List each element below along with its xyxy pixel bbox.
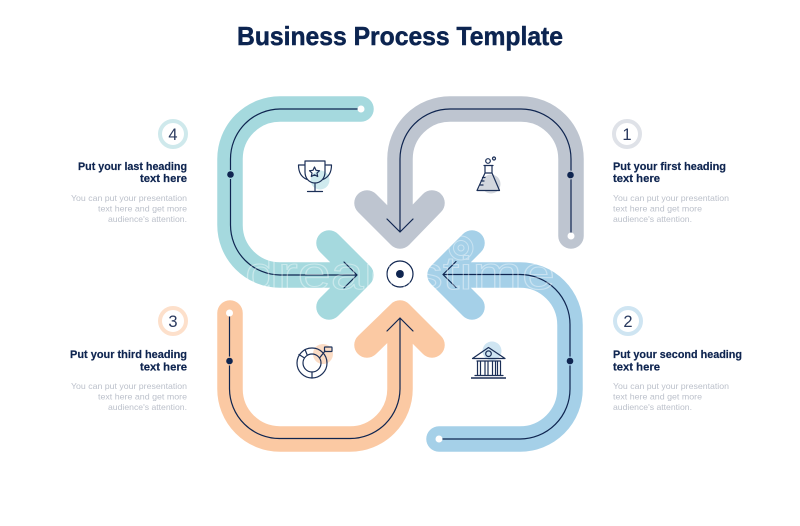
step 2 text block: Put your second heading: [613, 349, 742, 361]
step 1 text block: text here: [613, 173, 660, 185]
step 2 text block: audience's attention.: [613, 402, 692, 412]
icon: trophy: [298, 161, 332, 192]
step 4 text block: Put your last heading: [78, 161, 187, 173]
icon: flask: [477, 157, 500, 194]
step 4 text block: You can put your presentation: [71, 193, 187, 203]
step 1 text block: You can put your presentation: [613, 193, 729, 203]
step 1 text block: text here and get more: [613, 204, 702, 214]
step 1 text block: audience's attention.: [613, 214, 692, 224]
step 4 badge: 4: [168, 126, 178, 144]
arrow: step 1 grey: [367, 109, 575, 240]
step 1 text block: Put your first heading: [613, 161, 726, 173]
step 4 text block: audience's attention.: [108, 214, 187, 224]
arrow: step 2 blue: [436, 243, 574, 442]
watermark: [245, 236, 555, 299]
step 2 text block: text here and get more: [613, 392, 702, 402]
step 1 text block: [613, 121, 729, 224]
icon: ring chart: [297, 344, 333, 378]
arrow: step 4 teal: [226, 106, 364, 307]
step 2 badge: 2: [623, 313, 633, 331]
step 1 badge: 1: [622, 126, 632, 144]
watermark: dreamstime: [245, 247, 555, 299]
step 3 text block: [70, 308, 187, 412]
step 3 text block: text here and get more: [98, 392, 187, 402]
step 4 text block: text here and get more: [98, 204, 187, 214]
step 3 text block: audience's attention.: [108, 402, 187, 412]
step 4 text block: text here: [140, 173, 187, 185]
step 3 badge: 3: [168, 313, 178, 331]
icon: bank: [471, 342, 506, 378]
step 2 text block: You can put your presentation: [613, 381, 729, 391]
step 3 text block: Put your third heading: [70, 349, 187, 361]
arrow: step 3 orange: [225, 310, 432, 439]
title: Business Process Template: [237, 21, 563, 51]
center target: [387, 261, 413, 287]
step 2 text block: text here: [613, 362, 660, 374]
step 3 text block: text here: [140, 362, 187, 374]
step 3 text block: You can put your presentation: [71, 381, 187, 391]
step 4 text block: [71, 121, 187, 224]
step 2 text block: [613, 308, 742, 412]
